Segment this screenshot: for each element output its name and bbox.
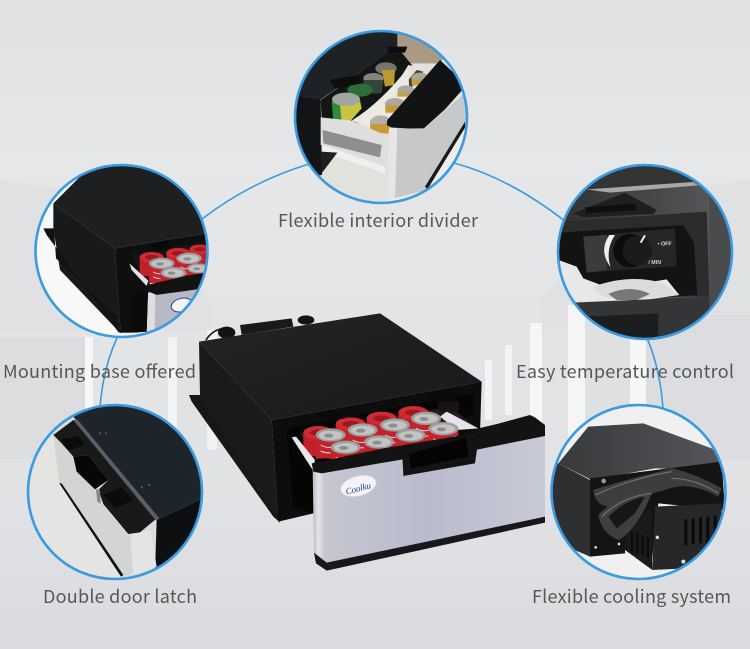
circle: flexible interior divider <box>294 30 468 204</box>
door bottom trim <box>314 517 545 571</box>
interior behind cans <box>300 407 473 460</box>
label: easy temperature control: Easy temperature control <box>516 358 734 384</box>
main product: drawer fridge <box>189 313 545 571</box>
circle: door latch <box>25 400 210 587</box>
tray lip <box>292 437 315 470</box>
cooling cords behind cabinet <box>206 315 314 340</box>
circle: temperature control: • OFF <box>658 241 672 247</box>
connector lines <box>100 163 663 408</box>
label: double door latch: Double door latch <box>43 583 197 609</box>
latches on cabinet <box>314 389 459 423</box>
door silver panel <box>313 435 545 563</box>
circle: cooling system <box>548 400 733 585</box>
label: mounting base offered: Mounting base offered <box>3 358 196 384</box>
door <box>387 60 467 129</box>
logo badge: Coolku <box>344 480 373 497</box>
cabinet top <box>199 313 482 420</box>
label: flexible cooling system: Flexible cooling system <box>532 583 731 609</box>
drawer opening <box>287 393 473 513</box>
circle: temperature control <box>556 164 734 340</box>
cabinet front <box>272 382 482 522</box>
left compartment cans <box>332 62 397 125</box>
mounting base plate <box>189 395 280 523</box>
label: flexible interior divider: Flexible interior divider <box>278 207 479 233</box>
cabinet side <box>199 342 278 522</box>
circle: temperature control: / MIN <box>648 260 661 266</box>
handle recess <box>409 437 468 468</box>
circle: mounting base <box>34 164 209 338</box>
door top cap and handle <box>312 415 545 476</box>
logo badge <box>338 472 379 500</box>
cans <box>303 406 458 471</box>
right compartment cans <box>370 73 429 134</box>
